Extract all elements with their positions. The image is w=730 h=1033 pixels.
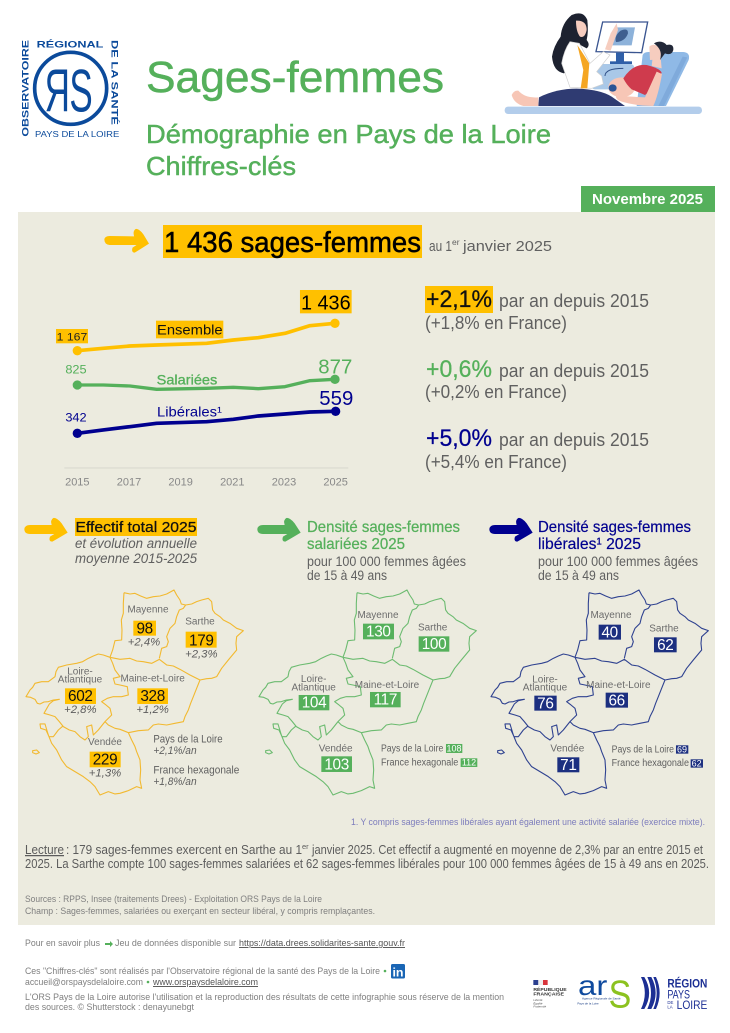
Loire-Atlantique [291, 674, 336, 712]
Sarthe [418, 623, 449, 653]
further information link [25, 938, 405, 949]
reference values: 108 [446, 744, 461, 754]
reference values [153, 734, 239, 788]
Sarthe: 62 [657, 637, 674, 654]
illustration: midwife performing an ultrasound [505, 13, 702, 114]
logo: Région Pays de la Loire: RÉGION [667, 975, 707, 990]
Vendée: 71 [560, 757, 577, 774]
Loire-Atlantique: Loire- [532, 675, 558, 686]
reference values: 112 [462, 758, 476, 768]
logo: Région Pays de la Loire: LA [667, 1005, 673, 1010]
axis and years [64, 467, 348, 489]
Mayenne: 98 [136, 620, 153, 637]
stat: libérales [425, 425, 649, 472]
logo: Observatoire régional de la santé [20, 38, 121, 139]
Sarthe: +2,3% [185, 648, 218, 660]
stat: libérales: par an depuis 2015 [499, 430, 649, 450]
logo: République française: Égalité [533, 1000, 543, 1005]
Vendée: +1,3% [89, 767, 121, 779]
Loire-Atlantique: +2,8% [64, 704, 97, 716]
Maine-et-Loire: Maine-et-Loire [120, 674, 185, 685]
Vendée [319, 743, 353, 773]
Vendée: Vendée [319, 743, 353, 754]
Loire-Atlantique: Loire- [301, 674, 326, 685]
logo: Région Pays de la Loire: DE [667, 1000, 673, 1005]
Loire-Atlantique [523, 675, 568, 712]
axis and years: 2015 [65, 477, 90, 489]
Loire-Atlantique [58, 666, 103, 716]
headline: 1 436 sages-femmes: au 1 [429, 239, 452, 255]
subtitle [146, 119, 551, 181]
Loire-Atlantique: 104 [302, 695, 327, 712]
arrow: headline [104, 229, 149, 253]
axis and years: 2023 [272, 477, 296, 489]
subtitle: Chiffres-clés [146, 151, 296, 181]
logo: Observatoire régional de la santé: R [45, 58, 70, 125]
axis and years: 2019 [168, 477, 193, 489]
heading: effectif total: et évolution annuelle [75, 536, 197, 551]
heading: densité libérales [538, 519, 698, 583]
Mayenne [590, 610, 632, 641]
Loire-Atlantique: Atlantique [523, 683, 568, 694]
heading: densité salariées: Densité sages-femmes [307, 519, 460, 536]
reading note [25, 842, 709, 871]
logo: République française: Fraternité [533, 1005, 546, 1009]
map: densité salariées [259, 590, 477, 795]
series: libérales: Libérales¹ [157, 404, 222, 420]
reference values: +2,1%/an [153, 745, 197, 757]
axis and years: 2025 [323, 477, 348, 489]
Mayenne: Mayenne [127, 605, 169, 616]
logo: République française: RÉPUBLIQUE [533, 985, 567, 993]
Mayenne [127, 605, 169, 648]
Sarthe [649, 623, 679, 654]
further information link: Pour en savoir plus [25, 938, 100, 949]
logo: Observatoire régional de la santé: S [69, 58, 93, 125]
heading: densité salariées: pour 100 000 femmes âgées [307, 554, 466, 569]
series: salariées [65, 356, 352, 390]
reference values: France hexagonale [381, 758, 459, 769]
series: ensemble [56, 290, 352, 355]
logo: République française [533, 980, 567, 1009]
departments outline [26, 590, 243, 795]
map: densité libérales [491, 590, 708, 795]
heading: effectif total: Effectif total 2025 [76, 519, 196, 536]
logo: ARS: ar [578, 970, 607, 1001]
credits: L'ORS Pays de la Loire autorise l'utilisation et la reproduction des résultats de cette infographie sous réserve de la mention [25, 992, 504, 1003]
reference values: Pays de la Loire [612, 744, 674, 755]
heading: densité libérales: Densité sages-femmes [538, 519, 691, 536]
reference values [612, 744, 703, 769]
headline: 1 436 sages-femmes [163, 225, 552, 259]
logo: ARS: S [609, 972, 631, 1016]
series: ensemble: 1 167 [57, 332, 87, 344]
departments outline [491, 590, 708, 795]
heading: effectif total: moyenne 2015-2025 [75, 551, 197, 566]
reference values: Pays de la Loire [381, 743, 444, 754]
Loire-Atlantique: 602 [68, 688, 93, 705]
departments outline [259, 590, 476, 795]
stat: ensemble: (+1,8% en France) [425, 313, 567, 333]
stat: ensemble: +2,1% [426, 286, 492, 313]
series: libérales [65, 388, 353, 438]
icon: LinkedIn: in [392, 966, 404, 980]
Sarthe: Sarthe [418, 623, 448, 634]
heading: densité salariées [307, 519, 466, 583]
date badge: Novembre 2025 [592, 192, 703, 208]
Maine-et-Loire: 328 [140, 688, 165, 705]
series: ensemble: 1 436 [301, 292, 351, 314]
stat: ensemble [425, 286, 649, 333]
Sarthe [185, 617, 218, 660]
logo: Observatoire régional de la santé: DE LA SANTÉ [110, 40, 121, 125]
heading: densité salariées: salariées 2025 [307, 536, 405, 553]
Vendée: 229 [93, 751, 117, 768]
Maine-et-Loire: 117 [374, 692, 397, 709]
logo: Observatoire régional de la santé: OBSERVATOIRE [20, 40, 30, 137]
Loire-Atlantique: Loire- [67, 666, 93, 677]
reference values: Pays de la Loire [153, 734, 223, 746]
credits: Ces "Chiffres-clés" sont réalisés par l'Observatoire régional de la santé des Pays de la Loire [25, 966, 380, 977]
headline: 1 436 sages-femmes: er [452, 237, 460, 247]
Sarthe: Sarthe [185, 617, 215, 628]
panel: main background [18, 212, 715, 925]
arrow: salariées [257, 518, 301, 542]
Vendée [550, 743, 585, 774]
series: ensemble: Ensemble [157, 321, 223, 337]
Loire-Atlantique: 76 [537, 695, 554, 712]
Sarthe: 100 [422, 636, 446, 653]
heading: effectif total [75, 518, 197, 566]
series: salariées: Salariées [157, 372, 217, 388]
logo: Région Pays de la Loire: PAYS [667, 987, 690, 1001]
Maine-et-Loire: Maine-et-Loire [586, 680, 651, 691]
Maine-et-Loire: +1,2% [136, 704, 169, 716]
Vendée: Vendée [88, 737, 122, 748]
series: libérales: 559 [319, 388, 353, 410]
heading: densité libérales: pour 100 000 femmes âgées [538, 554, 698, 569]
Vendée: Vendée [550, 743, 585, 754]
Mayenne [357, 610, 399, 641]
date badge [581, 186, 715, 212]
credits: www.orspaysdelaloire.com [152, 977, 258, 988]
reference values: France hexagonale [612, 758, 689, 769]
Maine-et-Loire [120, 674, 185, 716]
Mayenne: 40 [601, 624, 618, 641]
arrow: effectif [24, 518, 68, 542]
Loire-Atlantique: Atlantique [58, 674, 103, 685]
axis and years: 2017 [117, 477, 141, 489]
Maine-et-Loire [355, 680, 420, 709]
Vendée [88, 737, 122, 779]
Vendée: 103 [324, 756, 349, 773]
axis and years: 2021 [220, 477, 245, 489]
stat: salariées: par an depuis 2015 [499, 361, 649, 381]
Loire-Atlantique: Atlantique [291, 683, 336, 694]
heading: densité salariées: de 15 à 49 ans [307, 568, 387, 583]
further information link: Jeu de données disponible sur [115, 938, 236, 949]
reference values: France hexagonale [153, 764, 239, 776]
logo: ARS: Pays de la Loire [577, 1001, 599, 1005]
sources: Champ : Sages-femmes, salariées ou exerçant en secteur libéral, y compris remplaçantes. [25, 906, 375, 917]
stat: ensemble: par an depuis 2015 [499, 291, 649, 311]
Mayenne: +2,4% [128, 636, 160, 648]
heading: densité libérales: libérales¹ 2025 [538, 536, 641, 553]
Sarthe: Sarthe [649, 623, 679, 634]
stat: salariées: +0,6% [426, 356, 492, 383]
Mayenne: Mayenne [590, 610, 632, 621]
footnote: 1. Y compris sages-femmes libérales ayant également une activité salariée (exercice mixte). [351, 817, 705, 827]
reading note: : 179 sages-femmes exercent en Sarthe au 1 [66, 843, 302, 857]
credits: accueil@orspaysdelaloire.com [25, 977, 143, 988]
Maine-et-Loire [586, 680, 651, 709]
Mayenne: 130 [366, 624, 391, 641]
Sarthe: 179 [189, 632, 214, 649]
Maine-et-Loire: 66 [608, 692, 625, 709]
series: salariées: 877 [318, 356, 352, 378]
stat: salariées [425, 356, 649, 402]
stat: libérales: (+5,4% en France) [425, 452, 567, 472]
reference values: +1,8%/an [153, 776, 197, 788]
logo: Région Pays de la Loire: LOIRE [677, 998, 707, 1012]
further information link: https://data.drees.solidarites-sante.gouv.fr [239, 938, 405, 949]
heading: densité libérales: de 15 à 49 ans [538, 568, 619, 583]
reference values [381, 743, 477, 769]
series: libérales: 342 [65, 411, 87, 425]
arrow: libérales [489, 518, 533, 542]
logo: Observatoire régional de la santé: PAYS DE LA LOIRE [35, 129, 120, 139]
Maine-et-Loire: Maine-et-Loire [355, 680, 420, 691]
title: Sages-femmes [146, 53, 444, 102]
stat: salariées: (+0,2% en France) [425, 382, 567, 402]
credits: des sources. © Shutterstock : denayunebgt [25, 1002, 194, 1013]
reference values: 69 [677, 745, 687, 755]
stat: libérales: +5,0% [426, 425, 492, 452]
sources [25, 894, 375, 917]
credits [25, 966, 504, 1013]
headline: 1 436 sages-femmes: janvier 2025 [462, 239, 552, 255]
Mayenne: Mayenne [357, 610, 399, 621]
logo: Observatoire régional de la santé: RÉGIONAL [37, 38, 104, 49]
line chart: evolution 2015-2025 [56, 290, 353, 489]
logo: ARS [577, 970, 631, 1016]
reading note: er [302, 842, 309, 851]
reference values: 62 [692, 759, 702, 769]
logo: République française: Liberté [533, 998, 543, 1002]
logo: Région Pays de la Loire [641, 975, 707, 1012]
icon: LinkedIn [391, 964, 405, 980]
logo: République française: FRANÇAISE [533, 992, 565, 998]
map: effectif total [26, 590, 243, 795]
series: salariées: 825 [65, 362, 87, 376]
reading note: Lecture [25, 843, 64, 857]
logo: ARS: Agence Régionale de Santé [582, 996, 621, 1000]
headline: 1 436 sages-femmes: 1 436 sages-femmes [164, 227, 421, 259]
sources: Sources : RPPS, Insee (traitements Drees) - Exploitation ORS Pays de la Loire [25, 894, 322, 905]
subtitle: Démographie en Pays de la Loire [146, 119, 551, 149]
